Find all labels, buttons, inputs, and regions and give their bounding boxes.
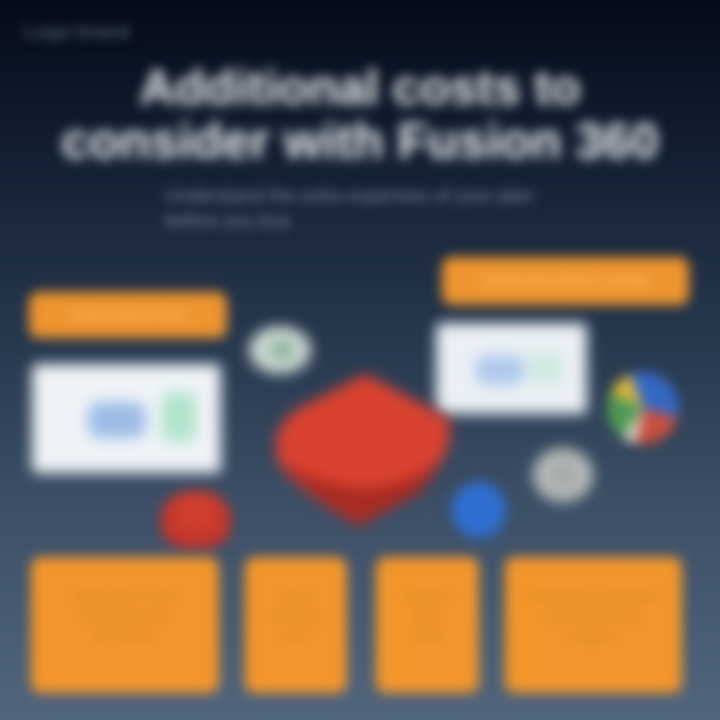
orange box 3: plan — [413, 608, 442, 625]
orange box 2: fees — [282, 628, 310, 645]
orange box 2: Cloud — [276, 588, 316, 605]
icon: small red cube — [161, 491, 231, 549]
orange box 4 — [505, 557, 682, 693]
icon: small green and white badge — [249, 326, 311, 374]
orange box 2: storage — [271, 608, 321, 625]
badge centre — [269, 340, 295, 360]
pill: left heading: Subscription fees — [70, 306, 186, 323]
pill: right heading — [442, 257, 689, 305]
title — [54, 60, 666, 169]
chart marks in right card — [476, 355, 524, 385]
icon: grey circle — [533, 448, 593, 502]
subtitle — [162, 186, 536, 232]
panel: right white card — [436, 323, 587, 414]
title: Additional costs to — [140, 61, 580, 115]
orange box 3: costs — [410, 628, 445, 645]
chart marks in left card — [88, 402, 146, 438]
orange box 4: and third-party — [545, 608, 642, 625]
icon: blue circle — [452, 482, 506, 538]
orange box 4: plugins — [570, 628, 617, 645]
subtitle: before you buy — [165, 211, 291, 232]
orange box 2 — [245, 557, 347, 693]
orange box 3: Support — [401, 588, 454, 605]
orange box 1: training costs — [81, 608, 169, 625]
title: consider with Fusion 360 — [61, 113, 659, 169]
pill: right heading: Cloud and add-on credits — [482, 272, 649, 289]
orange box 3 — [376, 557, 479, 693]
orange box 4: Hardware upgrades — [528, 588, 659, 605]
panel: left white card — [32, 364, 221, 473]
icon: multicolour pie — [607, 372, 679, 444]
orange box 1: Extensions and — [74, 588, 176, 605]
orange box 1: for teams — [94, 628, 156, 645]
orange box 1 — [31, 557, 219, 693]
pill: left heading — [29, 292, 227, 338]
logo text: Logo brand — [25, 22, 129, 43]
subtitle: Understand the extra expenses of your plan — [165, 186, 534, 207]
